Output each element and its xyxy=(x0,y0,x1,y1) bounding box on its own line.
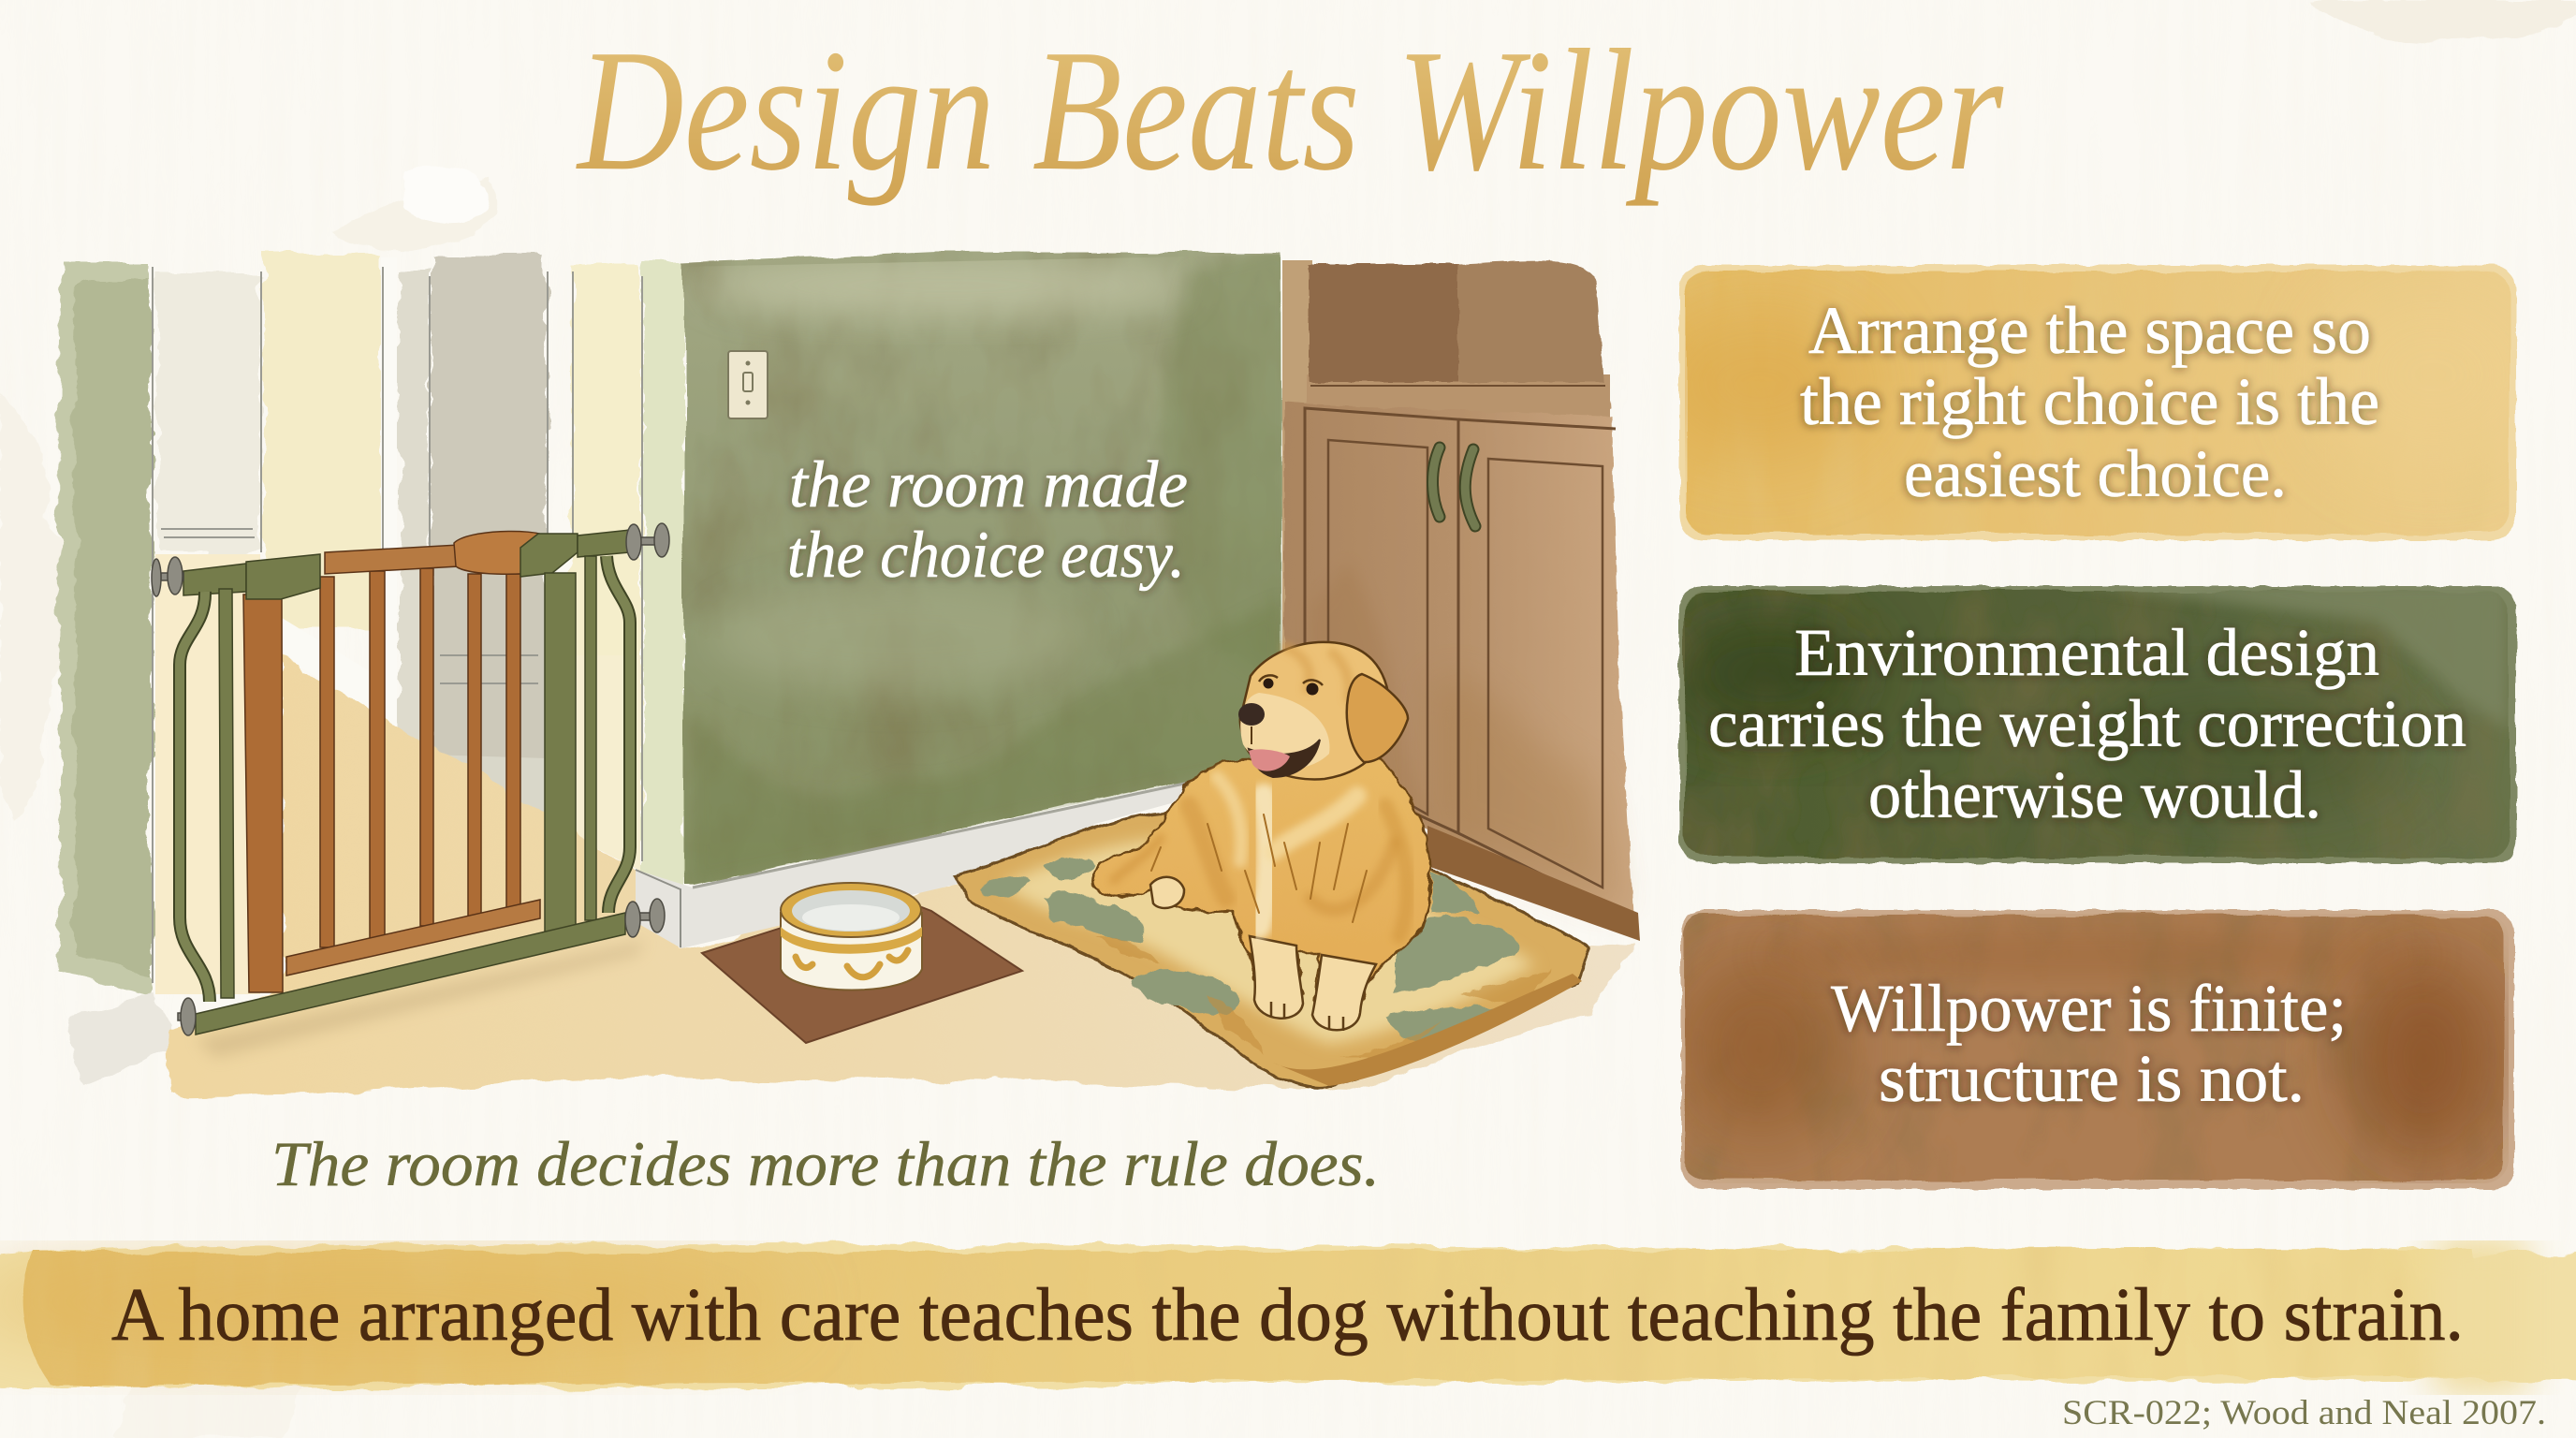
gate pressure knobs xyxy=(152,523,669,1035)
card: arrange the space: easiest choice. xyxy=(1904,436,2287,511)
cabinets xyxy=(1282,260,1640,941)
card: arrange the space xyxy=(1647,265,2546,540)
banner text: A home arranged with care teaches the dog without teaching the family to strain. xyxy=(111,1272,2464,1357)
floor shadow band xyxy=(196,941,646,1058)
green painted wall xyxy=(683,243,1292,885)
lower back areas xyxy=(155,554,260,994)
card: environmental design: otherwise would. xyxy=(1868,757,2321,832)
gate green frame xyxy=(183,530,630,1034)
bottom banner xyxy=(0,1236,2576,1395)
gate wood door xyxy=(243,531,545,992)
source note: SCR-022; Wood and Neal 2007. xyxy=(2062,1394,2546,1432)
room text: the room made xyxy=(789,448,1188,521)
dog bed cushion xyxy=(956,813,1589,1088)
card: willpower is finite: Willpower is finite; xyxy=(1831,971,2347,1046)
front legs and paws xyxy=(1150,877,1376,1031)
gate xyxy=(152,523,669,1035)
card: arrange the space: the right choice is the xyxy=(1800,364,2379,439)
card: willpower is finite xyxy=(1676,910,2514,1189)
skirting at left xyxy=(66,994,168,1086)
card: arrange the space: Arrange the space so xyxy=(1808,293,2371,368)
dog head xyxy=(1238,642,1408,779)
dog ear xyxy=(1347,674,1408,762)
golden retriever xyxy=(1092,642,1430,1031)
caption: The room decides more than the rule does. xyxy=(271,1128,1380,1199)
chest fur xyxy=(1114,777,1407,936)
floor xyxy=(167,655,1633,1095)
dog nose xyxy=(1238,703,1265,726)
card: willpower is finite: structure is not. xyxy=(1879,1041,2305,1116)
wall lines xyxy=(153,267,642,983)
dog mouth xyxy=(1249,740,1320,777)
room text xyxy=(787,448,1188,592)
card: environmental design xyxy=(1666,580,2516,863)
water bowl xyxy=(781,883,922,990)
card: environmental design: carries the weight correction xyxy=(1708,686,2466,761)
dog body xyxy=(1092,754,1430,1006)
illustration: room scene xyxy=(58,243,1640,1095)
cabinet handles xyxy=(1432,448,1475,526)
back wall panels xyxy=(58,255,685,997)
card: environmental design: Environmental design xyxy=(1794,615,2379,690)
baseboard xyxy=(636,779,1234,948)
bowl mat xyxy=(702,894,1022,1043)
light switch xyxy=(728,351,768,418)
title: Design Beats Willpower xyxy=(575,14,2004,207)
room text: the choice easy. xyxy=(787,519,1185,592)
